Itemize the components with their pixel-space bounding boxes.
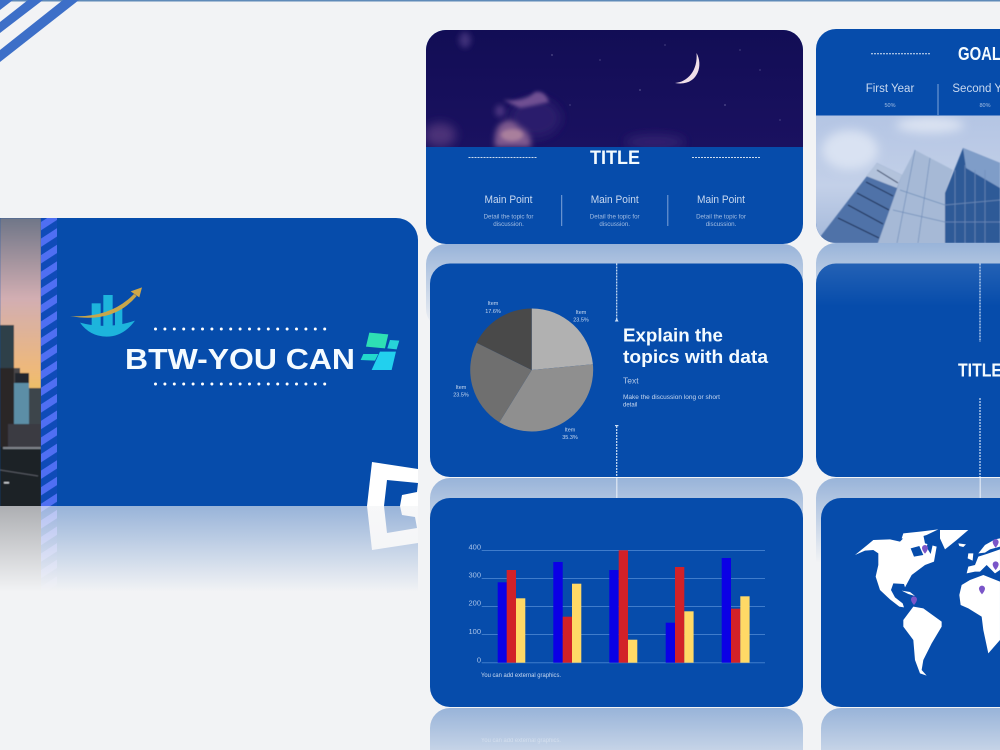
column one: Main Point: [484, 194, 532, 206]
body text: Make the discussion long or short: [623, 395, 720, 401]
body text: [623, 395, 720, 408]
pie labels: Item: [456, 385, 467, 391]
column two: [590, 194, 640, 228]
map pins: [911, 539, 999, 605]
panel: goal slide: [816, 29, 1000, 244]
dotted rule above title: [156, 328, 325, 330]
panel: world map slide: [821, 498, 1000, 707]
pie labels: 23.5%: [453, 392, 469, 398]
cover title: BTW-YOU CAN: [125, 344, 355, 376]
dashed rule left: [468, 156, 537, 158]
bar chart: 300: [468, 570, 481, 580]
second year column: 80%: [979, 103, 991, 109]
world map: [855, 529, 1000, 676]
bar chart: 200: [468, 598, 481, 608]
dashed rule: [871, 53, 931, 55]
slide heading: TITLE: [590, 148, 640, 169]
first year column: First Year: [866, 83, 914, 95]
cover stripe band: [41, 218, 57, 506]
panel: bar chart slide: [430, 498, 803, 707]
heading: topics with data: [623, 346, 769, 367]
column two: Detail the topic for: [590, 214, 640, 220]
icon: teal tiles: [361, 333, 399, 370]
column three: [696, 194, 746, 228]
crescent moon: [675, 53, 699, 83]
dotted connector top: [615, 264, 619, 322]
bar chart: 400: [468, 542, 481, 552]
glass building photo: [816, 116, 1000, 244]
body text: detail: [623, 402, 637, 408]
pie labels: 35.3%: [562, 435, 578, 441]
column one: discussion.: [493, 221, 524, 228]
white square corner mark: [367, 462, 418, 506]
dotted connector top: [979, 264, 981, 342]
dotted connector bottom: [615, 425, 618, 477]
dotted connector bottom: [979, 398, 981, 477]
pie labels: 23.5%: [573, 318, 589, 324]
column three: Detail the topic for: [696, 214, 746, 220]
pie chart: [470, 308, 593, 431]
top edge line: [0, 0, 1000, 2]
chart caption: You can add external graphics.: [481, 673, 561, 679]
bar chart: [468, 542, 765, 664]
heading: [623, 324, 769, 367]
panel: title only slide: [816, 264, 1000, 477]
column three: discussion.: [706, 221, 737, 228]
bar chart: 0: [477, 656, 481, 664]
column two: Main Point: [591, 194, 639, 206]
reflections beneath the other slides: You can add external graphics.: [481, 738, 561, 744]
first year column: 50%: [884, 103, 896, 109]
column one: Detail the topic for: [484, 214, 533, 220]
column one: [484, 194, 533, 228]
pie labels: 17.6%: [485, 309, 501, 315]
column two: discussion.: [599, 221, 630, 228]
first year column: [866, 83, 914, 109]
bar chart: 100: [468, 627, 481, 636]
cover city photo: [0, 218, 41, 507]
dashed rule right: [692, 156, 760, 158]
panel: cover slide: [0, 218, 418, 507]
pie labels: Item: [576, 310, 587, 316]
column three: Main Point: [697, 194, 745, 206]
decorative corner stripes: [0, 0, 79, 62]
pie labels: [453, 301, 589, 441]
night sky photo: [424, 30, 803, 149]
panel: pie chart slide: [430, 264, 803, 477]
reflections beneath the other slides: [426, 243, 1000, 750]
pie labels: Item: [488, 301, 499, 307]
sub heading: Text: [623, 376, 639, 386]
logo: bars with rising arrow: [70, 287, 142, 337]
pie labels: Item: [565, 428, 576, 434]
dotted rule below title: [156, 382, 325, 386]
reflection of cover slide: [0, 506, 418, 592]
panel: title slide with three points: [424, 30, 803, 244]
heading: Explain the: [623, 324, 723, 346]
second year column: [952, 83, 1000, 109]
